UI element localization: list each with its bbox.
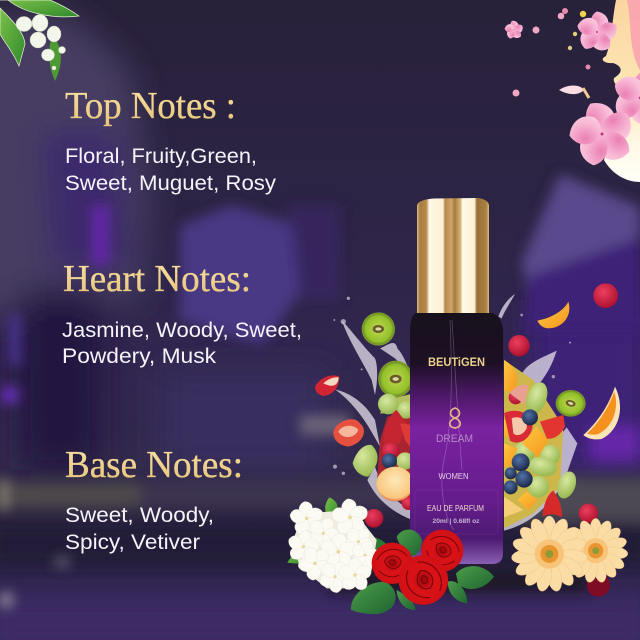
blueberries: [382, 409, 538, 494]
pink swirl: [627, 0, 640, 70]
lower blossom: [563, 96, 640, 175]
top-right pink blossoms: [504, 0, 640, 182]
flowers in front of bottle: [282, 497, 628, 614]
orange slice: [583, 387, 620, 439]
text: base notes list: Spicy, Vetiver: [65, 530, 200, 554]
strawberries: [315, 375, 565, 517]
gold cap: [417, 198, 489, 313]
text: base notes list: Sweet, Woody,: [65, 503, 214, 527]
floating petals and dots: [504, 8, 590, 98]
peach slice: [376, 467, 414, 501]
purple glass body: [410, 313, 503, 564]
heading: heart notes: Heart Notes:: [63, 258, 251, 300]
text: top notes list: Floral, Fruity,Green,: [65, 144, 257, 168]
jasmine cluster: [282, 499, 384, 600]
cream moon blob: [603, 0, 640, 182]
section: top notes: [65, 85, 276, 195]
type label: EAU DE PARFUM: [427, 503, 484, 513]
splash droplets: [333, 297, 571, 475]
glass highlights: [415, 320, 498, 534]
perfume bottle: [410, 198, 503, 564]
variant label: WOMEN: [438, 472, 469, 481]
green grapes: [353, 379, 580, 501]
orange wedge small: [537, 302, 569, 328]
top-left lily of the valley: [0, 0, 79, 81]
brand name: BEUTiGEN: [428, 355, 485, 369]
raspberries: [365, 283, 618, 597]
mango chunks: [504, 360, 548, 517]
text: heart notes list: Powdery, Musk: [62, 344, 216, 368]
volume label: 20ml | 0.68fl oz: [432, 519, 480, 525]
green leaves: [0, 0, 79, 81]
right blossom: [602, 62, 640, 137]
white bell flowers: [16, 14, 66, 70]
milk splash: [335, 294, 577, 531]
section: base notes: [65, 444, 243, 554]
heading: top notes: Top Notes :: [65, 85, 236, 127]
product name: DREAM: [436, 433, 473, 445]
section: heart notes: [62, 258, 302, 368]
icon: infinity logo: [450, 408, 460, 428]
kiwi slices: [362, 312, 590, 420]
green leaves: [287, 497, 494, 614]
text: top notes list: Sweet, Muguet, Rosy: [65, 171, 276, 195]
gerbera daisies: [511, 516, 628, 593]
fruit pile base: [377, 360, 563, 528]
red roses: [372, 522, 471, 614]
heading: base notes: Base Notes:: [65, 444, 243, 486]
upper blossom: [572, 8, 622, 58]
fruit splash behind bottle: [315, 283, 620, 597]
text: heart notes list: Jasmine, Woody, Sweet,: [62, 318, 302, 342]
